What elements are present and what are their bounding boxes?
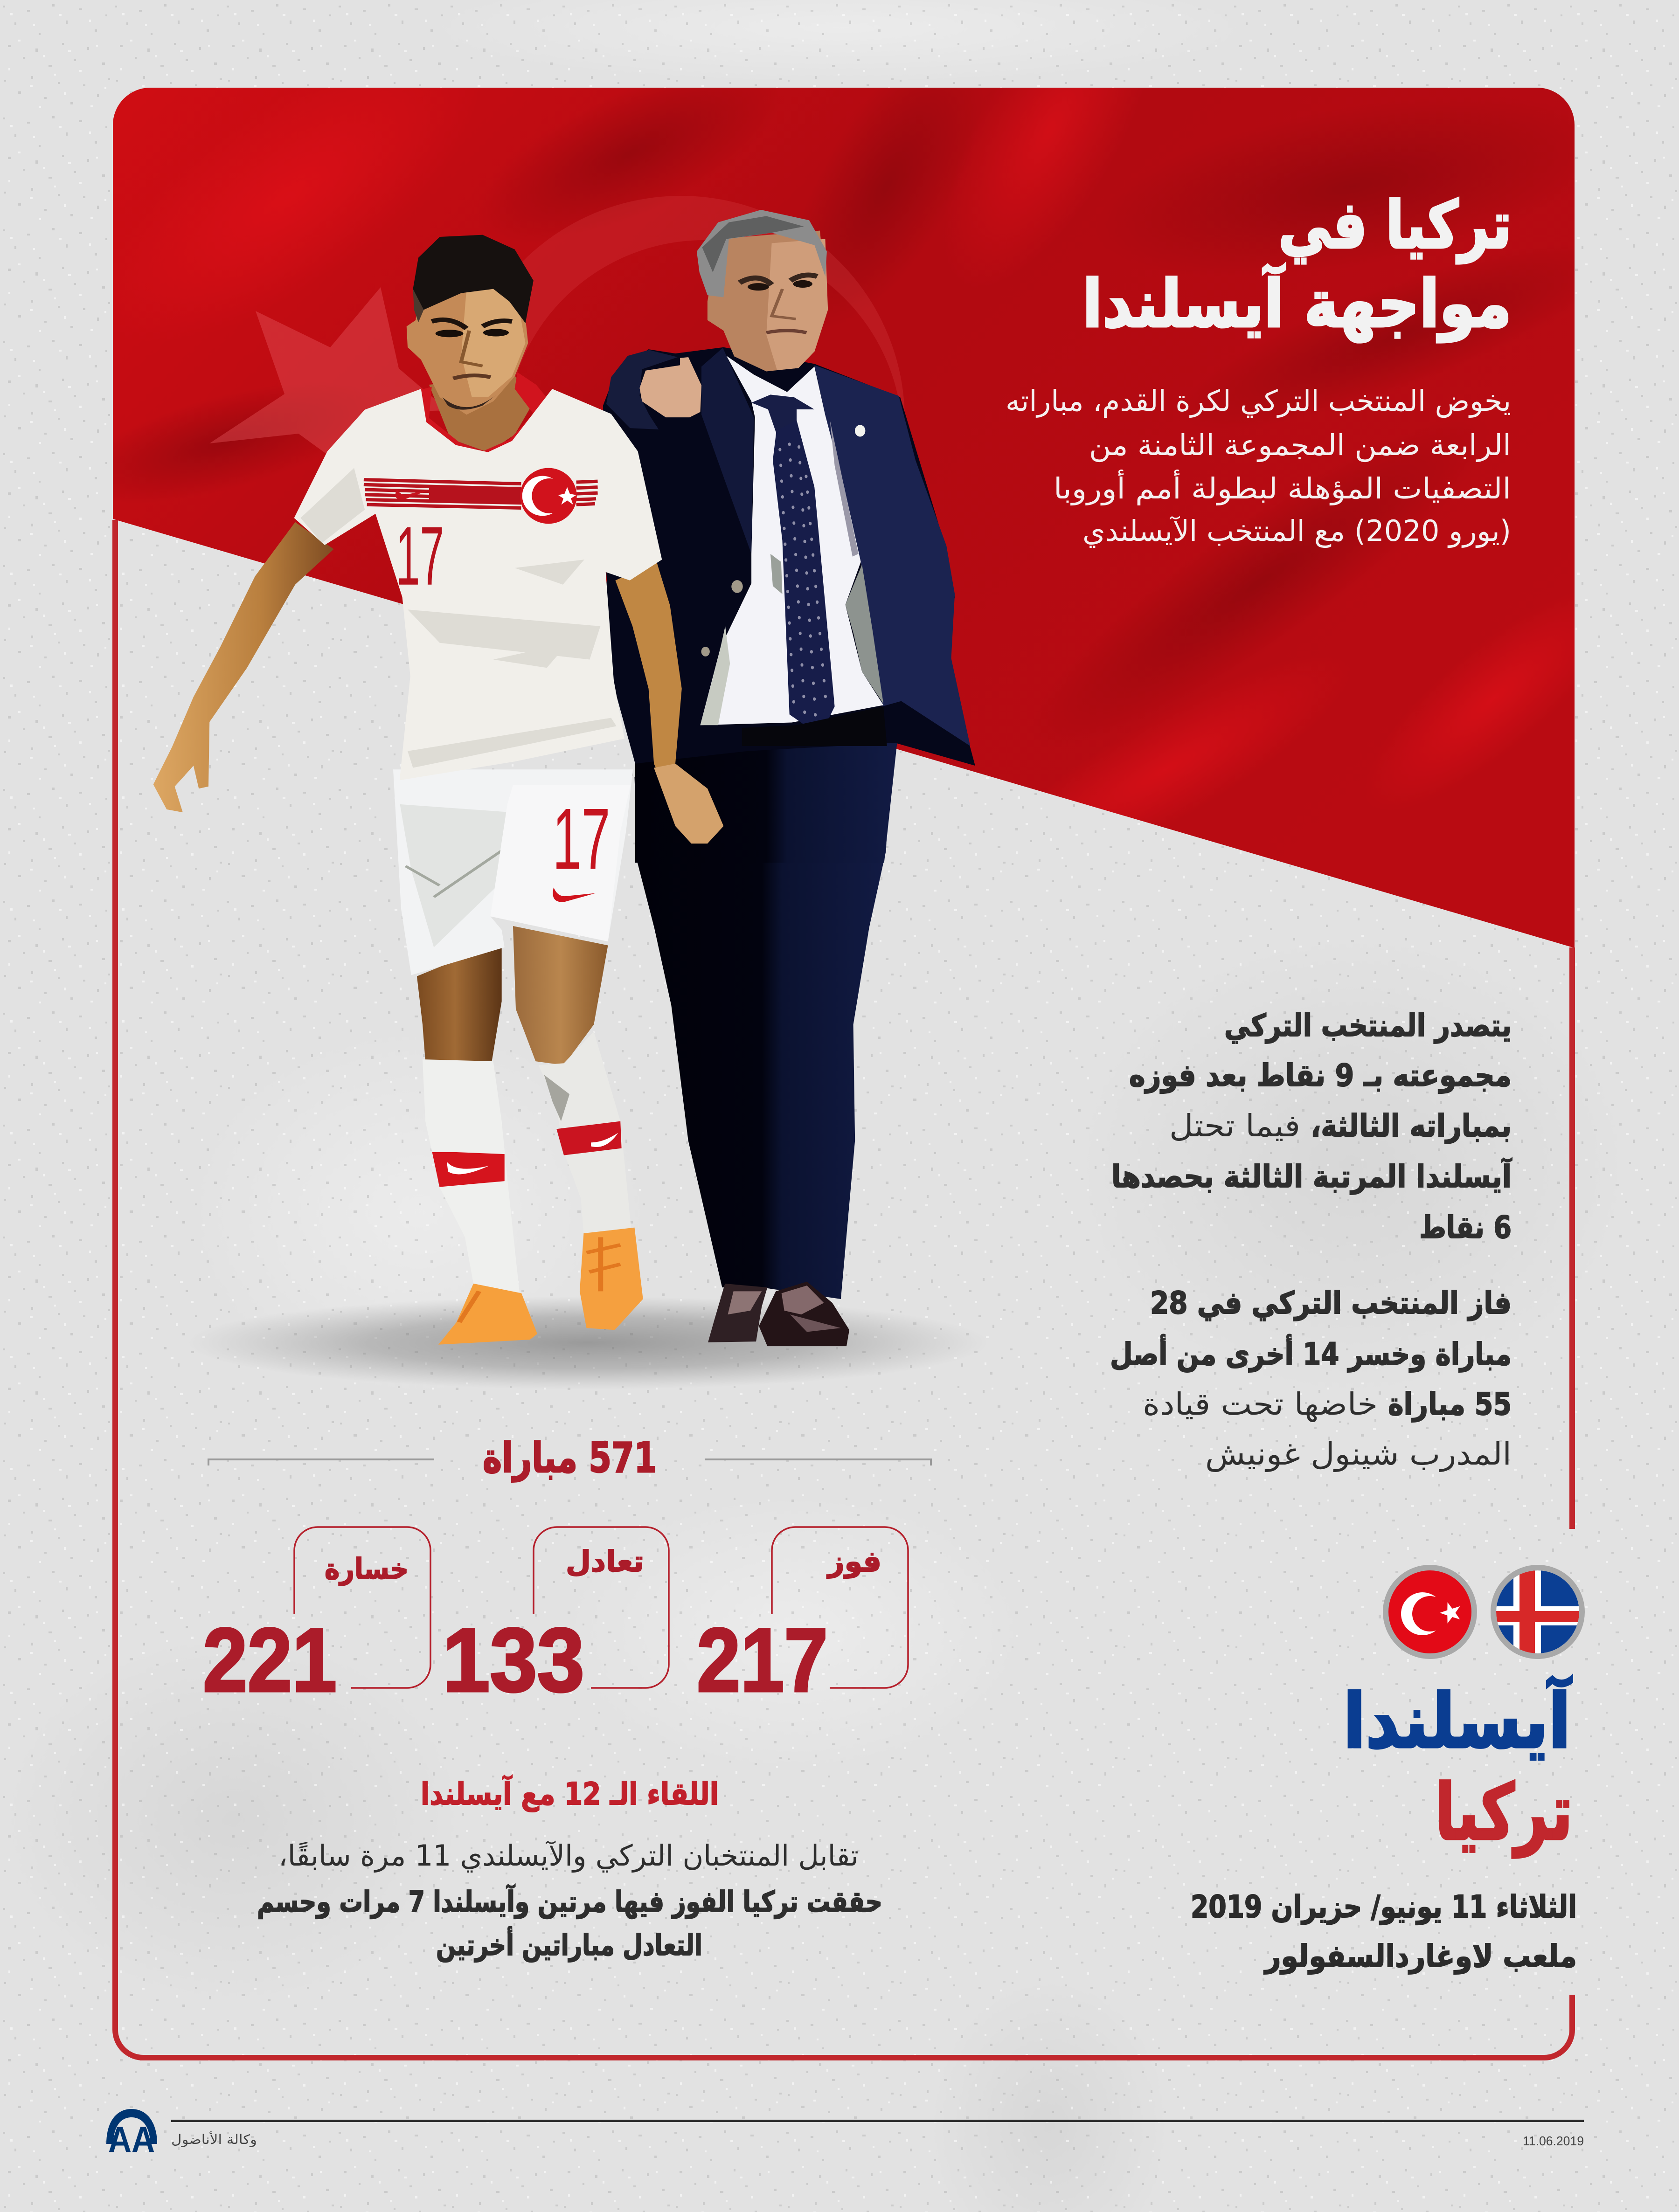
- title: تركيا في: [1278, 187, 1512, 263]
- text block: coach record: فاز المنتخب التركي في 28: [1150, 1285, 1512, 1321]
- jersey: [294, 389, 662, 780]
- text block: coach record: [1110, 1285, 1512, 1472]
- legs: [417, 941, 502, 1063]
- text block: coach record: المدرب شينول غونيش: [1205, 1436, 1512, 1472]
- text block: group standing: [1111, 1008, 1512, 1245]
- shirt: [700, 356, 883, 725]
- footer date: 11.06.2019: [1523, 2134, 1584, 2148]
- frame: bottom border thickening: [140, 2055, 1544, 2060]
- jacket left lapel: [701, 348, 754, 554]
- socks: [423, 1031, 631, 1295]
- match date and venue: الثلاثاء 11 يونيو/ حزيران 2019: [1191, 1889, 1577, 1925]
- team name: Turkey: تركيا: [1435, 1768, 1573, 1858]
- stat: wins 217: 217: [697, 1610, 828, 1711]
- stat: draws 133: 133: [443, 1610, 584, 1711]
- jersey swoosh: [395, 489, 430, 499]
- icon: Iceland flag: [1492, 1567, 1586, 1660]
- text block: coach record: خاضها تحت قيادة: [1143, 1386, 1378, 1422]
- match date and venue: ملعب لاوغاردالسفولور: [1263, 1938, 1577, 1975]
- neck: [429, 376, 539, 452]
- pointing hand: [639, 357, 701, 417]
- text block: group standing: بمباراته الثالثة،: [1311, 1108, 1512, 1144]
- heading: 12th meeting: اللقاء الـ 12 مع آيسلندا: [421, 1775, 719, 1812]
- shorts: 17: [553, 790, 610, 887]
- jersey stripes: [364, 480, 598, 508]
- title: مواجهة آيسلندا: [1082, 264, 1512, 343]
- text block: coach record: مباراة وخسر 14 أخرى من أصل: [1110, 1334, 1512, 1373]
- text block: group standing: يتصدر المنتخب التركي: [1224, 1008, 1512, 1044]
- shoes: [708, 1282, 849, 1346]
- panel: red flag header: [113, 88, 1575, 947]
- tie: [751, 394, 835, 736]
- arms: [153, 522, 723, 843]
- collar: [421, 372, 553, 452]
- intro paragraph: (يورو 2020) مع المنتخب الآيسلندي: [1082, 514, 1511, 548]
- icon: faint flag star: [210, 287, 439, 454]
- footer agency name: وكالة الأناضول: [171, 2131, 257, 2147]
- footer rule: [171, 2120, 1584, 2122]
- jacket: [602, 347, 975, 766]
- stat: losses 221: [203, 1527, 430, 1711]
- shorts: [393, 769, 633, 975]
- stat: losses 221: خسارة: [325, 1552, 409, 1586]
- text block: head to head: [257, 1839, 882, 1962]
- heading: 571 matches with rules: 571 مباراة: [483, 1434, 657, 1482]
- intro paragraph: [1006, 384, 1511, 548]
- text block: group standing: آيسلندا المرتبة الثالثة بحصدها: [1111, 1157, 1512, 1195]
- head: [407, 235, 534, 415]
- text block: group standing: 6 نقاط: [1419, 1210, 1512, 1245]
- stat: draws 133: [443, 1527, 669, 1711]
- shadow under figures: [187, 1296, 989, 1389]
- team name: Iceland: آيسلندا: [1343, 1675, 1572, 1765]
- head: [697, 210, 828, 371]
- intro paragraph: التصفيات المؤهلة لبطولة أمم أوروبا: [1054, 470, 1511, 505]
- text block: group standing: مجموعته بـ 9 نقاط بعد فوزه: [1129, 1058, 1512, 1094]
- stat: wins 217: فوز: [826, 1544, 881, 1578]
- frame: red border lines: [115, 520, 1572, 2058]
- text block: head to head: تقابل المنتخبان التركي والآيسلندي 11 مرة سابقًا،: [278, 1839, 859, 1873]
- text block: head to head: حققت تركيا الفوز فيها مرتين وآيسلندا 7 مرات وحسم: [257, 1884, 882, 1919]
- sleeve: [606, 350, 678, 429]
- intro paragraph: الرابعة ضمن المجموعة الثامنة من: [1089, 428, 1511, 462]
- stat: wins 217: [697, 1527, 908, 1711]
- figure: football player: 17: [396, 509, 444, 602]
- title: [1082, 187, 1512, 343]
- text block: head to head: التعادل مباراتين أخرتين: [436, 1926, 702, 1962]
- belt: [742, 706, 887, 746]
- icon: Turkey flag: [1386, 1568, 1474, 1656]
- match date and venue: [1191, 1889, 1577, 1975]
- trousers: [634, 777, 889, 1346]
- figure: coach: [602, 210, 975, 1346]
- heading: 571 matches with rules: [208, 1434, 931, 1482]
- text block: group standing: فيما تحتل: [1169, 1108, 1300, 1144]
- stat: losses 221: 221: [203, 1610, 337, 1711]
- icon: faint flag crescent: [459, 196, 905, 451]
- jacket right side: [814, 365, 970, 746]
- stat: draws 133: تعادل: [566, 1544, 644, 1578]
- intro paragraph: يخوض المنتخب التركي لكرة القدم، مباراته: [1006, 384, 1511, 418]
- jacket buttons and pin: [701, 425, 865, 657]
- boots: [438, 1228, 643, 1345]
- logo: Anadolu Agency: AA: [108, 2119, 155, 2160]
- figure: football player: [153, 235, 723, 1345]
- jersey badge: [520, 468, 577, 524]
- text block: coach record: 55 مباراة: [1388, 1386, 1512, 1422]
